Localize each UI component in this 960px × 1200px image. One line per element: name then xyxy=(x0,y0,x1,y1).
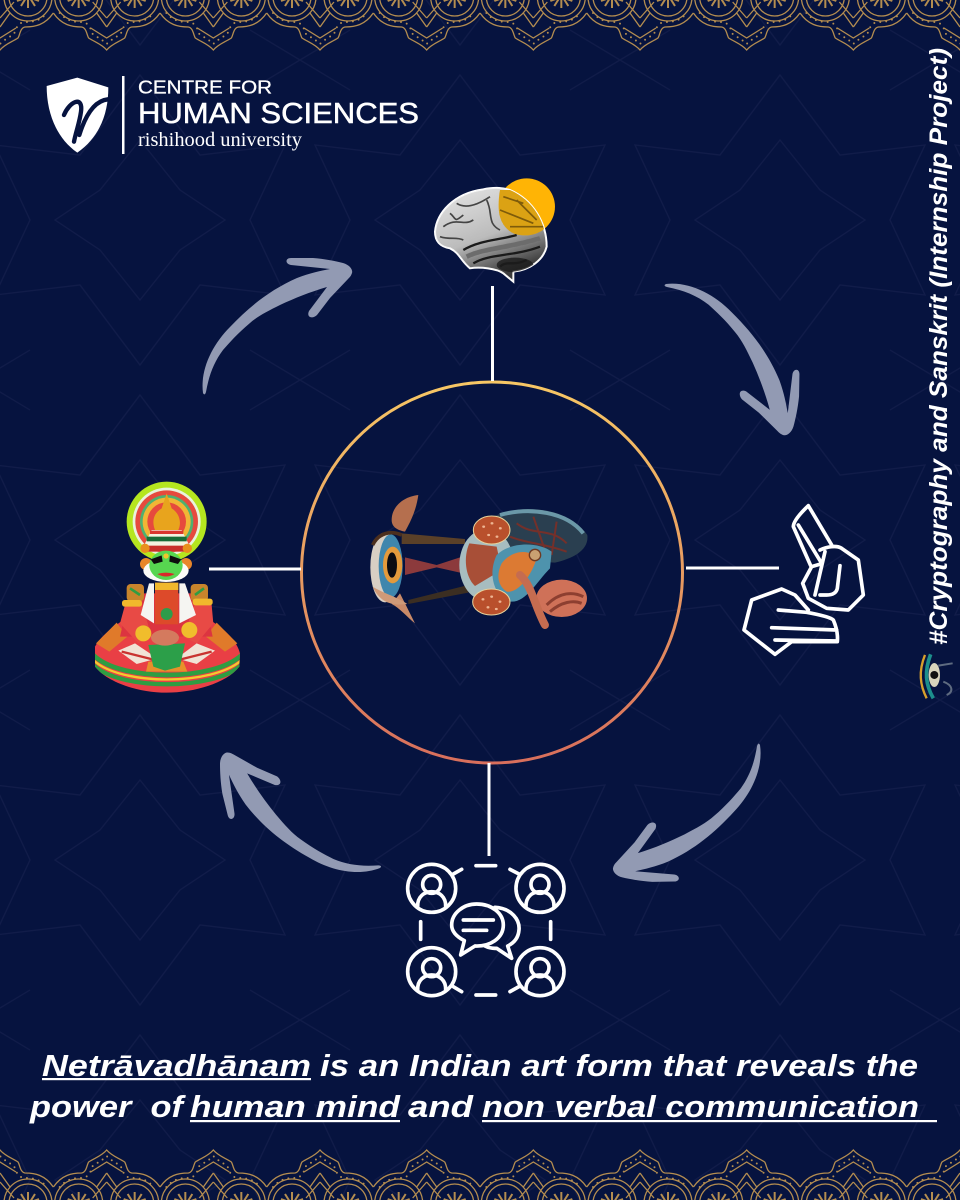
speech bubbles xyxy=(452,904,519,958)
central circle xyxy=(302,382,682,763)
lower organ xyxy=(536,580,587,617)
arrow: top right xyxy=(662,284,801,436)
icon: shield xyxy=(47,78,108,153)
connectors xyxy=(209,286,779,856)
arrow: bottom left xyxy=(213,723,381,901)
person top right xyxy=(516,864,564,912)
caption: Netrāvadhānam xyxy=(42,1048,311,1083)
lower hand xyxy=(744,589,837,654)
caption: non verbal communication xyxy=(482,1089,919,1124)
top ornamental border xyxy=(0,0,960,50)
person top left xyxy=(408,864,456,912)
upper hand xyxy=(793,506,863,610)
cerebrum xyxy=(490,509,587,563)
person bottom left xyxy=(408,948,456,996)
logo text: CENTRE FOR xyxy=(138,76,272,98)
link dashes xyxy=(421,866,551,995)
crown xyxy=(140,493,192,553)
caption: power of xyxy=(29,1089,186,1124)
optic tracts xyxy=(402,533,465,544)
arrow: top left xyxy=(203,258,352,394)
caption: and xyxy=(408,1089,474,1124)
arms and torso xyxy=(120,583,213,643)
icon: group conversation xyxy=(408,864,564,996)
icon: small eye of horus xyxy=(921,654,953,698)
icon: brain xyxy=(433,178,555,283)
person bottom right xyxy=(516,948,564,996)
logo text xyxy=(138,76,419,151)
vertical hashtag: #Cryptography and Sanskrit (Internship Project) xyxy=(925,48,953,645)
icon: sign language hands xyxy=(744,506,863,654)
eyeball xyxy=(370,532,400,602)
pleats and hands xyxy=(118,622,215,671)
halo xyxy=(127,482,207,562)
midbrain xyxy=(459,529,514,601)
logo text: HUMAN SCIENCES xyxy=(138,98,419,130)
logo xyxy=(47,76,419,154)
eye lids xyxy=(392,495,418,532)
bottom ornamental border xyxy=(0,1150,960,1200)
head xyxy=(140,551,192,582)
arrow: bottom right xyxy=(611,744,763,883)
illustration: eye and brain anatomy xyxy=(370,495,587,625)
orange discs xyxy=(473,516,510,544)
skirt xyxy=(93,620,242,693)
caption: is an Indian art form that reveals the xyxy=(320,1048,918,1083)
illustration: kathakali dancer xyxy=(93,482,242,693)
caption: human mind xyxy=(190,1089,401,1124)
logo text: rishihood university xyxy=(138,129,302,151)
caption xyxy=(29,1048,937,1124)
